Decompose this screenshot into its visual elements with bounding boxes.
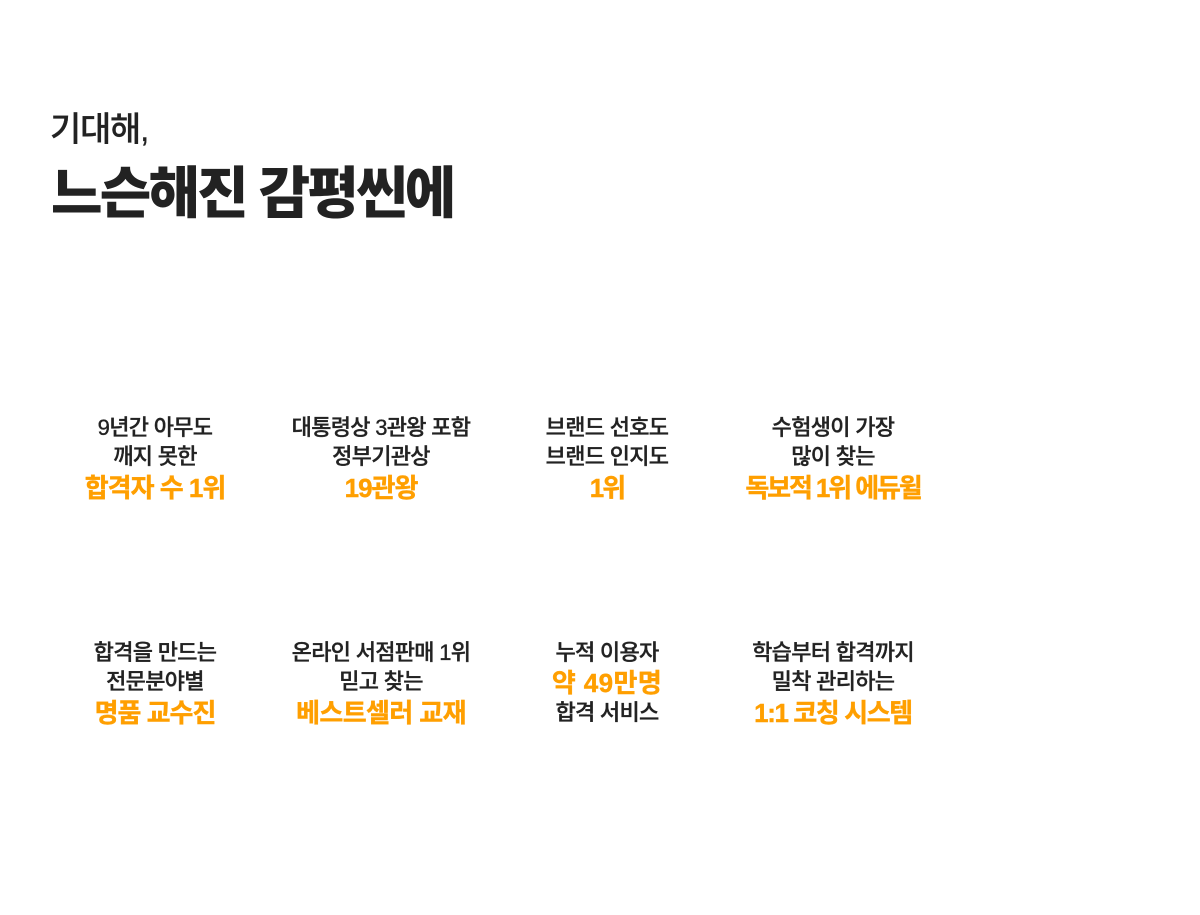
panel: 베스트셀러 교재: 믿고 찾는 (339, 669, 423, 694)
panel: 합격자 수 1위: 합격자 수 1위 (85, 473, 225, 503)
title line: small heading: 기대해, (50, 111, 148, 149)
panel: 명품 교수진 (94, 640, 216, 728)
panel: 19관왕 (292, 415, 470, 503)
panel: 1:1 코칭 시스템: 학습부터 합격까지 (752, 640, 914, 665)
panel: 독보적 1위 에듀윌: 수험생이 가장 (772, 415, 894, 440)
panel: 베스트셀러 교재: 온라인 서점판매 1위 (292, 640, 470, 665)
panel: 약 49만명: 합격 서비스 (555, 700, 659, 725)
title (50, 111, 454, 225)
panel: 19관왕: 19관왕 (345, 473, 417, 503)
panel: 약 49만명: 누적 이용자 (555, 640, 659, 665)
panel: 합격자 수 1위 (85, 415, 225, 503)
panel: 약 49만명 (552, 640, 662, 725)
panel: 약 49만명: 약 49만명 (552, 668, 662, 698)
panel: 명품 교수진: 합격을 만드는 (94, 640, 216, 665)
panel: 독보적 1위 에듀윌: 많이 찾는 (791, 444, 875, 469)
panel: 독보적 1위 에듀윌: 독보적 1위 에듀윌 (745, 473, 921, 503)
panel: 명품 교수진: 전문분야별 (106, 669, 204, 694)
panel: 1:1 코칭 시스템: 1:1 코칭 시스템 (754, 698, 912, 728)
panel: 브랜드 1위: 브랜드 선호도 (546, 415, 668, 440)
panel: 합격자 수 1위: 9년간 아무도 (98, 415, 212, 440)
panel: 명품 교수진: 명품 교수진 (95, 698, 215, 728)
panel: 19관왕: 대통령상 3관왕 포함 (292, 415, 470, 440)
panel: 베스트셀러 교재 (292, 640, 470, 728)
title line: large heading: 느슨해진 감평씬에 (51, 162, 454, 225)
panel: 1:1 코칭 시스템: 밀착 관리하는 (772, 669, 894, 694)
panel: 합격자 수 1위: 깨지 못한 (113, 444, 197, 469)
panel: 브랜드 1위: 브랜드 인지도 (546, 444, 668, 469)
panel: 독보적 1위 에듀윌 (745, 415, 921, 503)
panel: 베스트셀러 교재: 베스트셀러 교재 (296, 698, 466, 728)
panel: 브랜드 1위 (546, 415, 668, 503)
panel: 1:1 코칭 시스템 (752, 640, 914, 728)
panel: 19관왕: 정부기관상 (332, 444, 430, 469)
panel: 브랜드 1위: 1위 (590, 473, 624, 503)
